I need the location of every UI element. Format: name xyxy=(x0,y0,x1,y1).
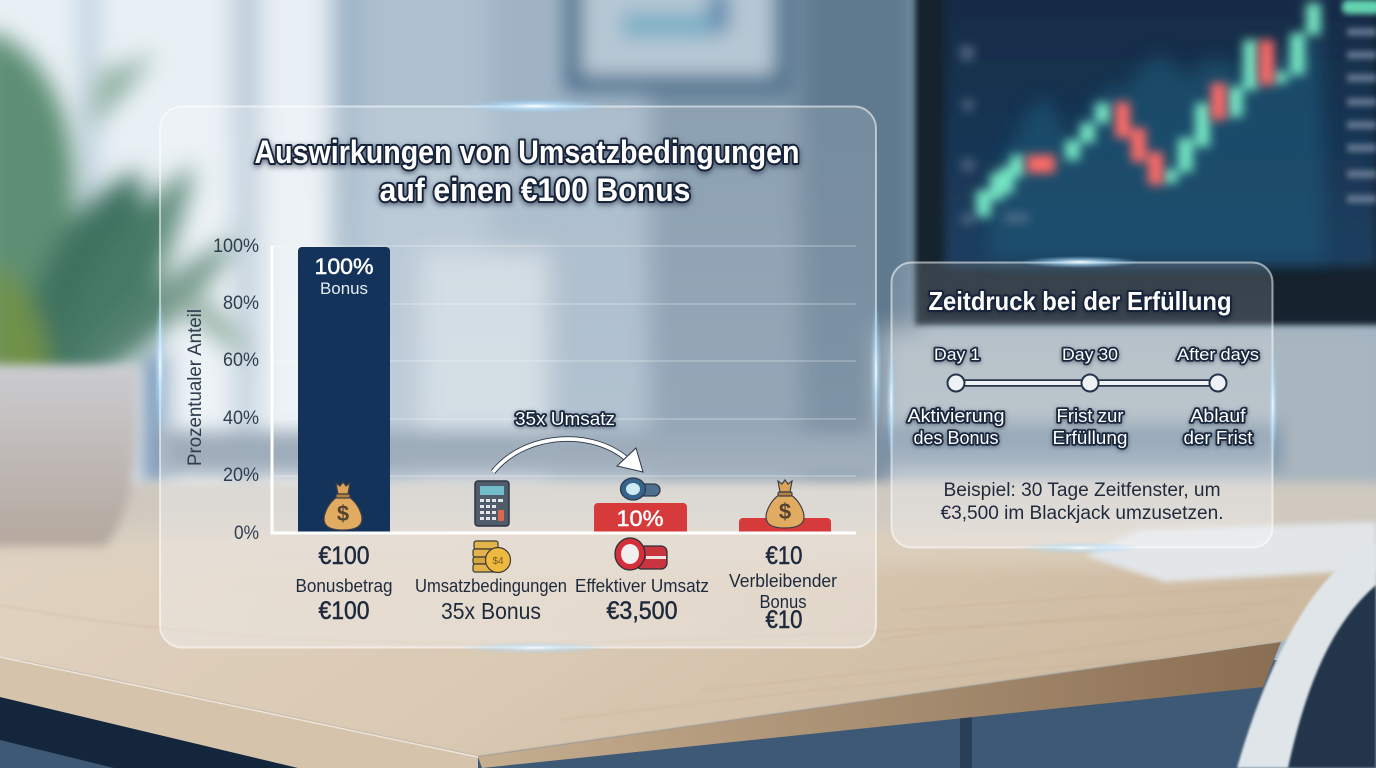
y axis labels: 60% xyxy=(223,350,259,371)
category: Effektiver Umsatz xyxy=(575,538,709,625)
icon: gold coins: $4 xyxy=(492,556,504,567)
timeline labels: Erfüllung xyxy=(1052,428,1128,448)
title xyxy=(254,134,800,208)
timeline labels: Aktivierung xyxy=(908,406,1004,426)
icon: gold coins xyxy=(473,541,510,572)
category: Umsatzbedingungen: Umsatzbedingungen xyxy=(415,576,567,596)
bar: bonus 100%: Bonus xyxy=(320,279,368,298)
category: Verbleibender Bonus: Bonus xyxy=(760,592,806,612)
chair xyxy=(1237,542,1376,768)
arrow: 35x Umsatz: 35x Umsatz xyxy=(515,409,615,429)
title: auf einen €100 Bonus xyxy=(380,172,690,208)
category: Bonusbetrag: €100 xyxy=(318,542,370,570)
icon: blue chips xyxy=(620,478,660,500)
icon: money bag xyxy=(324,482,362,530)
timeline labels: der Frist xyxy=(1184,428,1252,448)
bar: bonus 100%: 100% xyxy=(314,254,374,279)
bar: effektiver Umsatz 10%: 10% xyxy=(616,506,664,531)
heading: Zeitdruck bei der Erfüllung xyxy=(928,286,1232,316)
category: Verbleibender Bonus: €10 xyxy=(766,606,802,634)
timeline xyxy=(948,374,1226,392)
y axis labels: 0% xyxy=(234,523,259,544)
chart axes xyxy=(272,246,856,533)
category: Verbleibender Bonus: Verbleibender xyxy=(729,571,837,591)
y axis labels: 80% xyxy=(223,293,259,314)
pot xyxy=(0,365,138,546)
y axis labels: 100% xyxy=(213,236,259,257)
arrow: 35x Umsatz xyxy=(493,409,643,472)
y axis title: Prozentualer Anteil xyxy=(185,309,206,466)
timeline labels: After days xyxy=(1177,345,1259,364)
bar: effektiver Umsatz 10% xyxy=(594,503,687,532)
keyboard xyxy=(1085,522,1376,582)
dark band behind desk xyxy=(160,425,1280,476)
timeline labels: Day 1 xyxy=(934,345,980,364)
panel glass xyxy=(892,262,1272,548)
icon: calculator xyxy=(475,481,509,526)
category: Umsatzbedingungen: 35x Bonus xyxy=(441,598,541,624)
timeline labels: Ablauf xyxy=(1190,406,1247,426)
category: Umsatzbedingungen xyxy=(415,541,567,624)
desk far band xyxy=(0,482,1376,582)
icon: money bag: $ xyxy=(337,501,349,526)
bar: verbleibender Bonus xyxy=(739,518,831,532)
panel glass xyxy=(160,106,876,648)
category: Bonusbetrag xyxy=(296,542,392,625)
icon: money bag: $ xyxy=(779,499,791,524)
timeline labels: Frist zur xyxy=(1056,406,1124,426)
y axis labels: 40% xyxy=(223,408,259,429)
desk front edges xyxy=(0,657,478,768)
timeline labels xyxy=(908,345,1259,448)
category: Effektiver Umsatz: €3,500 xyxy=(606,597,678,625)
example note xyxy=(940,480,1224,524)
y axis labels: 20% xyxy=(223,465,259,486)
category: Bonusbetrag: €100 xyxy=(318,597,370,625)
panel: bonus chart xyxy=(154,99,882,654)
monitor xyxy=(915,0,1376,325)
icon: red chips xyxy=(615,538,667,570)
desk surface xyxy=(0,530,1376,757)
category: Verbleibender Bonus xyxy=(729,542,837,634)
example note: €3,500 im Blackjack umzusetzen. xyxy=(940,503,1224,524)
under desk xyxy=(0,660,1376,768)
icon: money bag xyxy=(766,480,804,528)
bar: bonus 100% xyxy=(298,247,390,532)
example note: Beispiel: 30 Tage Zeitfenster, um xyxy=(944,480,1220,501)
category: Verbleibender Bonus: €10 xyxy=(766,542,802,570)
y axis labels xyxy=(213,236,259,544)
panel: time pressure xyxy=(886,256,1278,554)
plant xyxy=(0,30,250,385)
wall picture xyxy=(565,0,790,92)
category: Effektiver Umsatz: Effektiver Umsatz xyxy=(575,576,709,596)
timeline labels: Day 30 xyxy=(1062,345,1118,364)
timeline labels: des Bonus xyxy=(914,428,998,448)
title: Auswirkungen von Umsatzbedingungen xyxy=(254,134,800,170)
category: Bonusbetrag: Bonusbetrag xyxy=(296,576,392,596)
